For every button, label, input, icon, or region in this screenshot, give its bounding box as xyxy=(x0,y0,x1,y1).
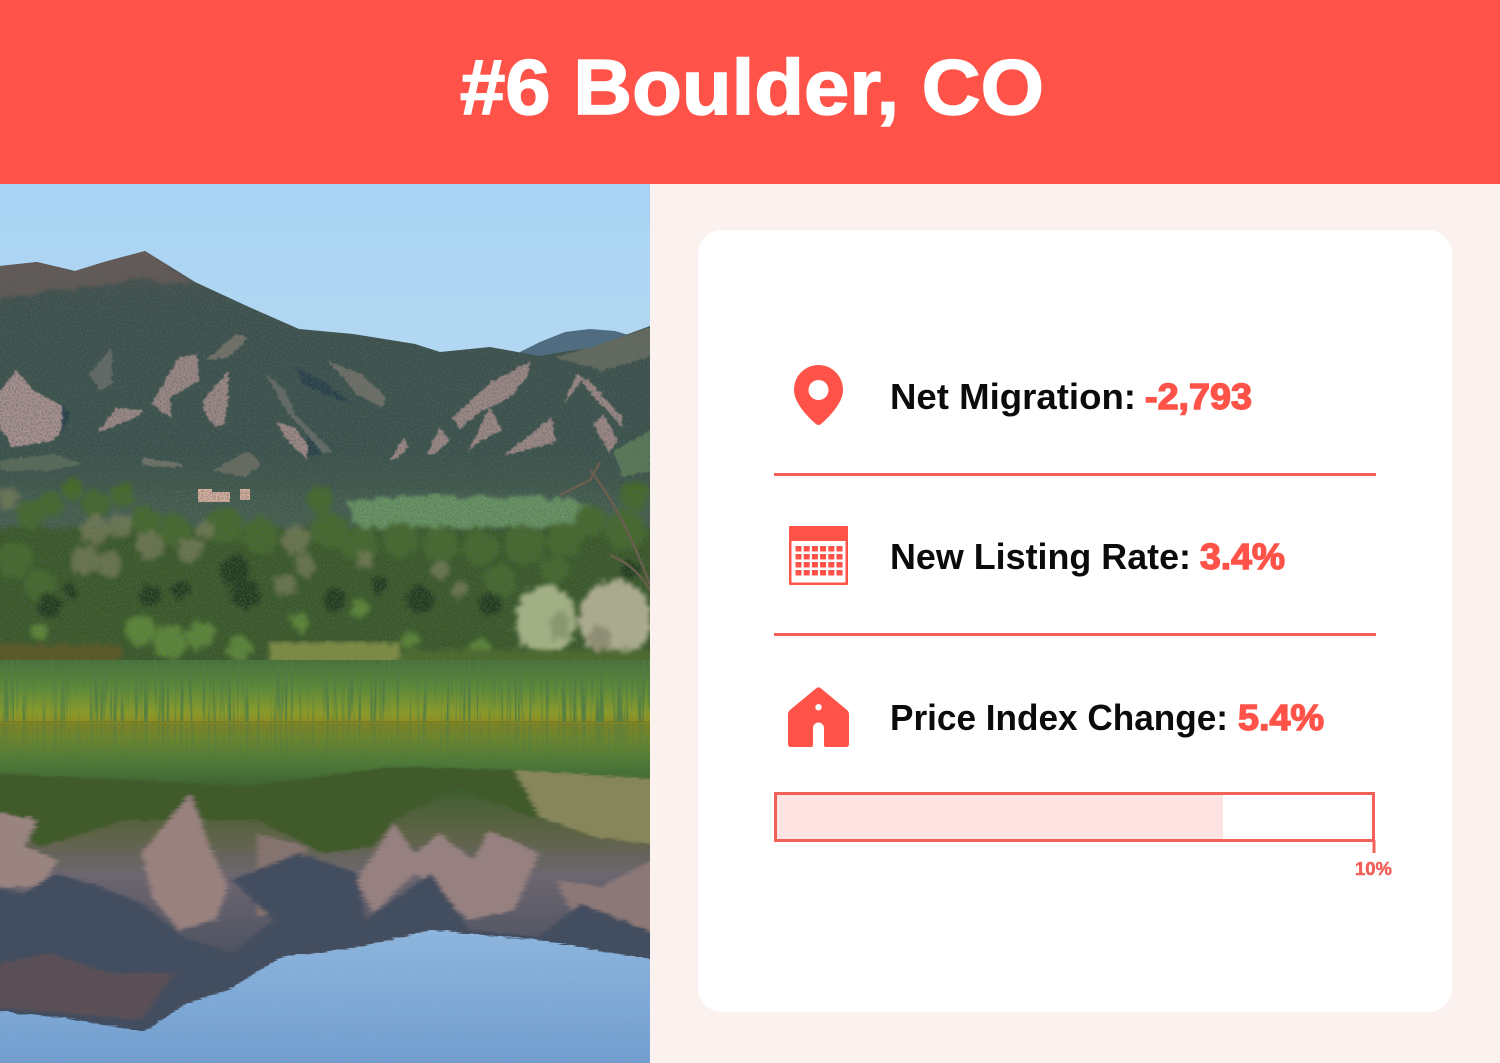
bank xyxy=(0,640,650,660)
new listing rate text: 3.4% xyxy=(1200,536,1285,577)
net migration text: -2,793 xyxy=(1145,376,1252,417)
tree line xyxy=(0,535,650,665)
icon: calendar xyxy=(789,526,848,585)
meadow xyxy=(345,495,590,532)
reeds xyxy=(0,660,650,724)
icon: house xyxy=(788,687,849,747)
title banner xyxy=(0,0,1500,184)
net migration text: Net Migration: xyxy=(890,376,1136,417)
bare tree branches xyxy=(560,462,650,590)
water xyxy=(0,722,650,1016)
progress bar xyxy=(776,794,1392,879)
reflection detail xyxy=(0,767,672,1040)
price index change text: Price Index Change: xyxy=(890,697,1228,738)
bar scale label: 10% xyxy=(1355,859,1392,879)
distant building xyxy=(198,489,250,502)
panel: statistics card xyxy=(698,230,1452,1012)
lake surface xyxy=(0,930,684,1063)
new listing rate text: New Listing Rate: xyxy=(890,536,1191,577)
pale shrubs xyxy=(516,580,651,660)
icon: map pin xyxy=(794,365,843,425)
photo: Boulder flatirons reflected in a lake xyxy=(0,184,684,1063)
price index change text: 5.4% xyxy=(1238,697,1324,738)
title: #6 Boulder, CO xyxy=(460,43,1044,131)
